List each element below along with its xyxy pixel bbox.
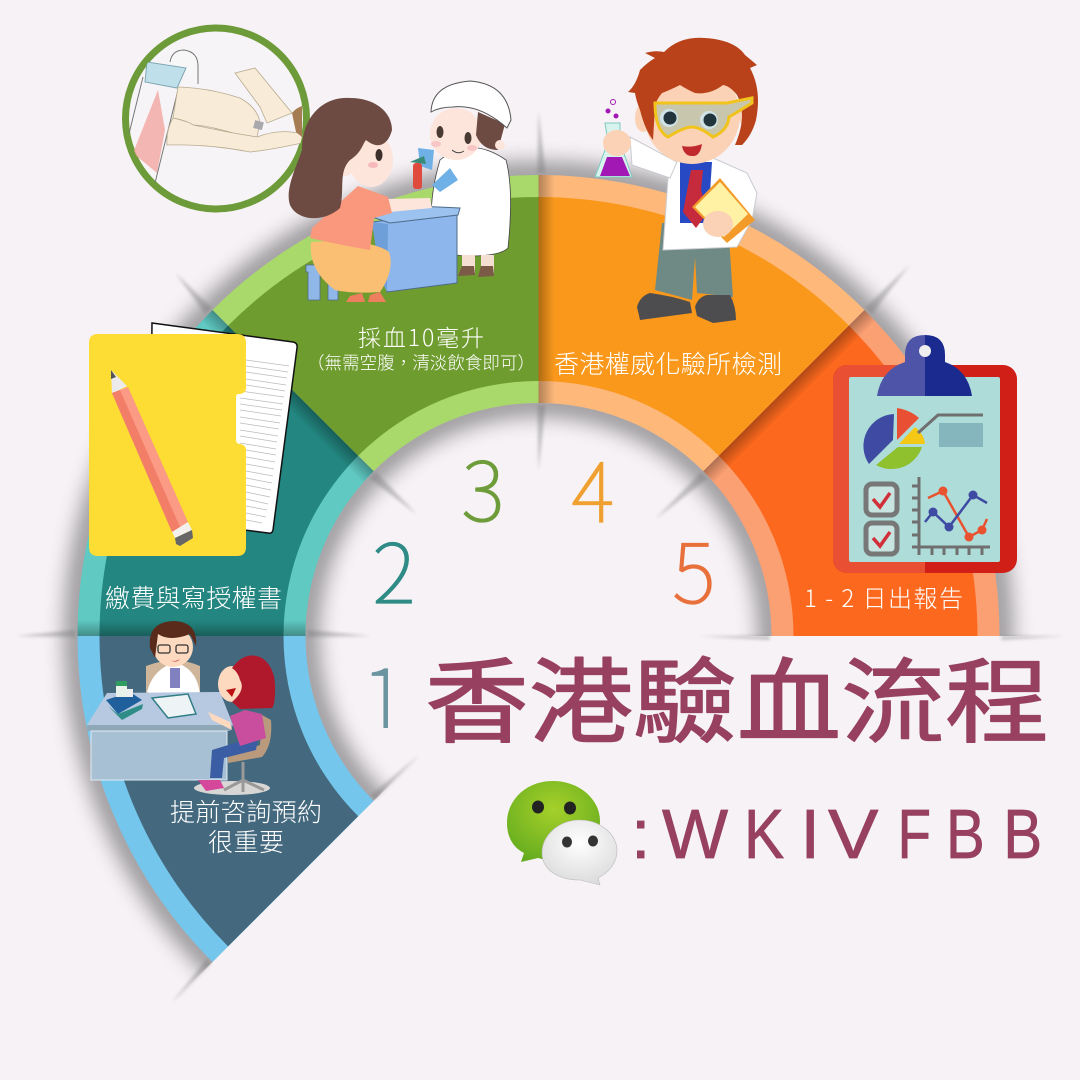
sector 2: payment, teal [78,310,374,636]
pie chart [863,408,925,469]
step number 2: 2 [373,508,415,627]
hand on clipboard [703,211,733,237]
wechat id: V [828,796,879,873]
radial fan of five process sectors [78,175,1000,962]
sector 1: consult, blue [78,636,374,962]
folder [89,334,246,556]
desk [372,205,460,292]
wechat id: B [1003,795,1042,873]
line chart [912,477,990,555]
illustration: woman having blood drawn by nurse [289,81,511,302]
wechat id: I [800,795,820,873]
patient [198,656,275,791]
checkboxes [866,484,897,554]
icon: blood draw magnified inset [125,28,306,209]
label: step 1 consult: 提前咨詢預約 [170,793,322,829]
trousers [655,223,733,300]
icon: scientist with flask [595,38,758,323]
hair [628,38,758,145]
nurse [410,81,511,277]
step number 1: 1 [360,630,408,763]
label: step 5 report: 1 - 2 日出報告 [804,579,963,614]
wechat id [631,795,1042,874]
step number 5: 5 [673,508,715,627]
sector 3: blood draw, green [212,175,538,471]
label: step 1 consult: 很重要 [208,823,284,859]
illustration: doctor consultation [87,621,275,795]
woman [289,98,432,302]
sector 5: report, deep orange [703,310,1000,636]
label: step 3 blood draw: 採血10毫升 [358,319,484,353]
wechat id: B [946,795,985,873]
mouth [682,144,702,156]
pencil [111,370,193,546]
label: step 4 lab: 香港權威化驗所檢測 [554,345,782,381]
wechat id: F [898,796,931,874]
lab coat [663,158,757,250]
floor shadow [194,781,270,795]
clipboard [692,178,755,243]
clipboard on desk [152,694,196,718]
clip [877,335,972,396]
doctor chair [146,660,200,698]
sector 4: lab test, orange [538,175,864,471]
label: step 1 consult [170,793,322,859]
fold shadows between sectors [78,175,876,636]
step number 4: 4 [572,427,614,546]
goggles [655,98,752,137]
shoes [637,293,692,320]
patient chair [224,715,271,792]
icon: wechat logo [507,781,617,885]
wechat id: K [744,795,784,873]
hand [603,130,631,156]
ears [635,104,651,132]
desk [87,692,233,780]
ring drop shadows [78,175,1000,1080]
label: step 3 note: （無需空腹，清淡飲食即可） [307,350,535,375]
icon: report clipboard [833,335,1017,573]
icon: folder, paper and pencil [89,323,297,556]
label: step 2 payment: 繳費與寫授權書 [105,579,282,615]
paper [150,323,297,533]
wechat id: : [631,795,650,873]
stool [306,265,344,300]
doctor coat [147,664,200,697]
flask [595,100,632,177]
title: 香港驗血流程 [425,629,1049,762]
step number 3: 3 [462,426,504,545]
wechat id: W [662,795,728,873]
books and bottles [106,681,143,720]
face [644,66,740,164]
doctor head [150,621,196,667]
